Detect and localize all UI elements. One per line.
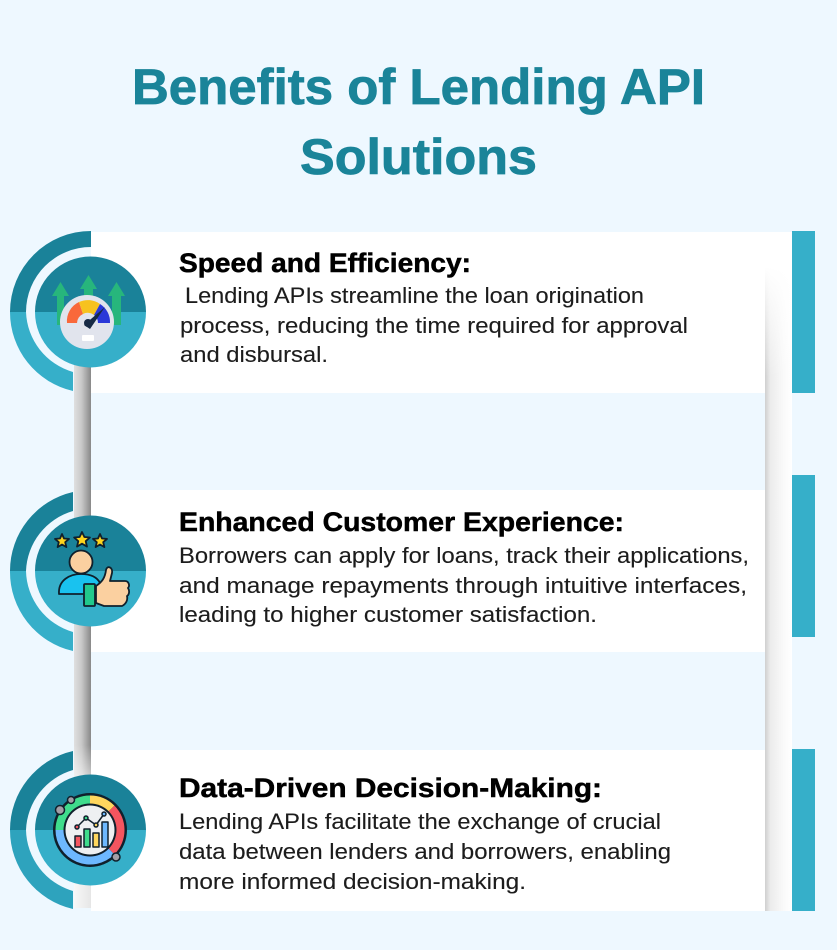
outer arc top — [10, 492, 73, 571]
icon: rating and thumbs up — [55, 532, 129, 606]
outer arc bottom — [10, 312, 73, 391]
circle top half — [35, 516, 146, 571]
body text — [180, 283, 688, 367]
right accent bar 3 — [792, 749, 815, 911]
circle top half — [35, 256, 146, 312]
title: Solutions — [300, 129, 537, 185]
heading: Speed and Efficiency: — [179, 248, 471, 278]
circle bottom half — [35, 571, 146, 626]
outer arc bottom — [10, 830, 73, 909]
panel: data-driven decision-making — [91, 750, 765, 911]
body text: and disbursal. — [180, 342, 328, 367]
body text: more informed decision-making. — [179, 869, 526, 894]
right accent bar 1 — [792, 231, 815, 393]
outer arc top — [10, 231, 91, 312]
body text: process, reducing the time required for approval — [180, 313, 688, 338]
badge: data-driven — [10, 751, 146, 909]
icon: analytics dashboard — [53, 793, 127, 867]
card background — [91, 490, 765, 652]
badge: customer experience — [10, 492, 146, 651]
right side shadow strip — [765, 232, 792, 911]
badge: speed — [10, 231, 146, 391]
circle top half — [35, 774, 146, 830]
outer arc bottom — [10, 571, 73, 651]
body text: data between lenders and borrowers, enabling — [179, 839, 671, 864]
circle bottom half — [35, 830, 146, 886]
body text — [179, 809, 671, 894]
body text: Lending APIs facilitate the exchange of crucial — [179, 809, 661, 834]
heading: Enhanced Customer Experience: — [179, 507, 624, 537]
panel: speed and efficiency — [91, 232, 765, 393]
body text: Borrowers can apply for loans, track their applications, — [179, 543, 749, 568]
title — [132, 59, 705, 185]
right accent bar 2 — [792, 475, 815, 637]
icon: gauge with arrows — [52, 275, 125, 349]
circle bottom half — [35, 312, 146, 368]
body text: leading to higher customer satisfaction. — [179, 602, 597, 627]
panel: enhanced customer experience — [91, 490, 765, 652]
card background — [91, 232, 765, 393]
body text: Lending APIs streamline the loan origination — [185, 283, 644, 308]
title: Benefits of Lending API — [132, 59, 705, 115]
outer arc top — [10, 751, 73, 830]
body text — [179, 543, 749, 627]
body text: and manage repayments through intuitive interfaces, — [179, 573, 747, 598]
card background — [91, 750, 765, 911]
connector pole — [74, 360, 91, 908]
heading: Data-Driven Decision-Making: — [179, 773, 602, 803]
